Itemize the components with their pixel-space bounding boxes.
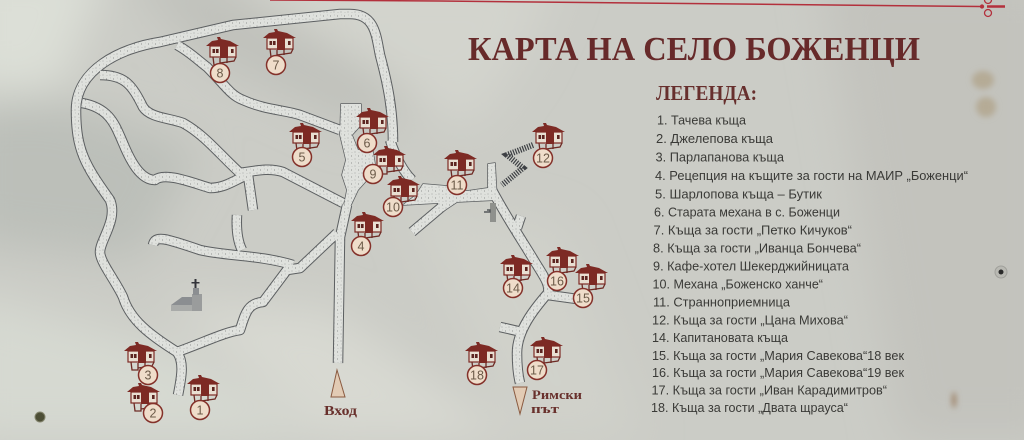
legend list: 8. Къща за гости „Иванца Бончева“ bbox=[653, 242, 861, 256]
road network bbox=[76, 14, 577, 395]
house 6: 6 bbox=[364, 136, 371, 150]
legend list: 14. Капитановата къща bbox=[652, 331, 788, 345]
house 15: 15 bbox=[576, 292, 590, 306]
house 10: 10 bbox=[386, 200, 400, 214]
legend list: 2. Джелепова къща bbox=[656, 132, 773, 146]
roman road label: Римски bbox=[532, 387, 583, 402]
legend list: 12. Къща за гости „Цана Михова“ bbox=[652, 314, 848, 328]
house 17: 17 bbox=[530, 364, 544, 378]
house markers bbox=[124, 29, 608, 422]
house 2 bbox=[127, 383, 162, 422]
roman road label: път bbox=[531, 401, 560, 416]
house 1: 1 bbox=[197, 404, 204, 418]
church bbox=[171, 279, 202, 311]
legend list: 17. Къща за гости „Иван Карадимитров“ bbox=[652, 384, 887, 398]
legend list: 9. Кафе-хотел Шекерджийницата bbox=[653, 260, 849, 274]
entrance label: Вход bbox=[324, 404, 357, 419]
legend list: 15. Къща за гости „Мария Савекова“18 век bbox=[652, 349, 905, 363]
house 4: 4 bbox=[358, 240, 365, 254]
house 17 bbox=[528, 337, 563, 380]
house 12: 12 bbox=[536, 152, 550, 166]
legend list: 10. Механа „Боженско ханче“ bbox=[652, 278, 823, 292]
house 16: 16 bbox=[550, 274, 564, 288]
house 9 bbox=[364, 146, 406, 184]
house 6 bbox=[356, 108, 389, 152]
house 10 bbox=[384, 176, 420, 216]
house 7: 7 bbox=[273, 58, 280, 72]
house 1 bbox=[187, 375, 220, 420]
water fountain bbox=[484, 203, 496, 222]
stairs bbox=[502, 145, 533, 185]
legend heading: ЛЕГЕНДА: bbox=[656, 81, 757, 105]
house 16 bbox=[546, 247, 579, 290]
legend list: 5. Шарлопова къща – Бутик bbox=[655, 188, 823, 202]
screw right bbox=[995, 266, 1007, 278]
legend list: 7. Къща за гости „Петко Кичуков“ bbox=[654, 224, 852, 238]
legend list: 4. Рецепция на къщите за гости на МАИР „Боженци“ bbox=[655, 169, 968, 183]
house 9: 9 bbox=[370, 168, 377, 182]
legend list: 1. Тачева къща bbox=[657, 114, 746, 128]
house 3: 3 bbox=[145, 368, 152, 382]
legend list: 11. Странноприемница bbox=[653, 296, 790, 310]
house 14 bbox=[500, 255, 533, 298]
house 11 bbox=[444, 150, 477, 194]
house 18: 18 bbox=[470, 368, 484, 382]
house 18 bbox=[465, 342, 498, 384]
house 8 bbox=[206, 37, 239, 82]
legend list: 18. Къща за гости „Двата щрауса“ bbox=[651, 401, 848, 415]
entrance arrow bbox=[331, 370, 345, 397]
house 5: 5 bbox=[299, 150, 306, 164]
legend list: 16. Къща за гости „Мария Савекова“19 век bbox=[652, 366, 905, 380]
roman road arrow bbox=[513, 387, 527, 414]
ornament bbox=[980, 0, 1005, 16]
house 14: 14 bbox=[506, 282, 520, 296]
house 11: 11 bbox=[451, 178, 464, 192]
wall stains bbox=[952, 71, 996, 408]
house 15 bbox=[574, 264, 608, 308]
legend list: 6. Старата механа в с. Боженци bbox=[654, 206, 840, 220]
house 12 bbox=[532, 123, 565, 168]
legend list bbox=[651, 114, 968, 415]
screw bottom left bbox=[35, 412, 45, 422]
house 4 bbox=[351, 212, 384, 256]
house 2: 2 bbox=[150, 406, 157, 420]
house 8: 8 bbox=[217, 66, 224, 80]
house 3 bbox=[124, 342, 158, 384]
legend list: 3. Парлапанова къща bbox=[656, 150, 784, 164]
house 5 bbox=[289, 123, 322, 166]
top border line with ornament bbox=[270, 0, 1005, 16]
title: КАРТА НА СЕЛО БОЖЕНЦИ bbox=[468, 31, 920, 68]
house 7 bbox=[263, 29, 296, 74]
